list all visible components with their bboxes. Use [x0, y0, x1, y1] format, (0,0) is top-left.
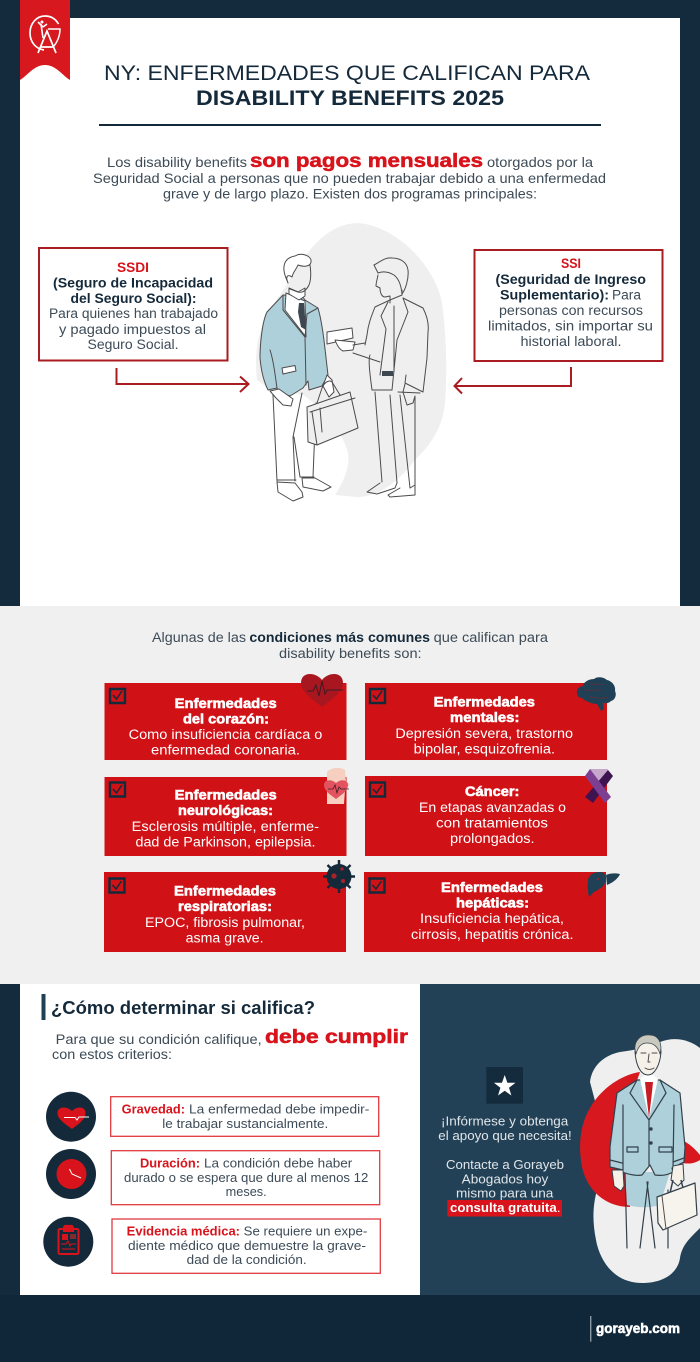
icon: medical clipboard	[43, 1217, 93, 1267]
criterion: evidencia médica: Evidencia médica:	[127, 1225, 240, 1239]
call to action text: mismo para una	[456, 1186, 553, 1200]
card: respiratorias: EPOC, fibrosis pulmonar,	[145, 915, 305, 930]
intro sentence: que califican para	[434, 630, 549, 645]
call to action text: el apoyo que necesita!	[438, 1129, 572, 1143]
card: corazón	[104, 674, 346, 760]
panel: introduction	[20, 0, 680, 608]
left man	[260, 254, 358, 501]
criterion: gravedad: Gravedad:	[122, 1103, 185, 1117]
illustration: lawyer with briefcase	[580, 1035, 700, 1283]
intro text: Los disability benefits	[107, 154, 247, 170]
icon: severity heart	[46, 1092, 96, 1142]
footer: website: gorayeb.com	[596, 1321, 680, 1336]
arrow: SSDI to illustration	[116, 368, 248, 392]
icon: virus	[323, 860, 355, 893]
title: NY: ENFERMEDADES QUE CALIFICAN PARA	[104, 62, 590, 85]
panel: qualifying conditions	[0, 606, 700, 984]
right man	[327, 258, 428, 497]
card: mentales	[365, 677, 616, 760]
intro text: Seguridad Social a personas que no pueden trabajar debido a una enfermedad	[93, 170, 606, 186]
criteria introduction	[52, 1026, 408, 1062]
criterion: gravedad	[111, 1097, 379, 1136]
box: SSI	[474, 250, 662, 361]
icon: liver	[588, 872, 620, 897]
card: neurológicas: neurológicas:	[178, 803, 273, 818]
box: SSI: historial laboral.	[520, 334, 622, 349]
logo ribbon	[20, 0, 70, 80]
arrow: SSI to illustration	[454, 367, 571, 394]
call to action text: Abogados hoy	[462, 1172, 549, 1186]
card: cáncer: Cáncer:	[465, 784, 519, 799]
box: SSI: SSI	[561, 256, 581, 271]
criteria introduction: debe cumplir	[265, 1026, 408, 1048]
icon: brain	[577, 677, 616, 711]
card: cáncer: prolongados.	[450, 831, 535, 846]
title	[104, 62, 590, 110]
criterion: duración: durado o se espera que dure al menos 12	[124, 1171, 368, 1185]
box: SSI: limitados, sin importar su	[488, 318, 653, 334]
card: hepáticas	[364, 872, 620, 952]
card: corazón: Como insuficiencia cardíaca o	[129, 727, 322, 742]
illustration: two businessmen	[256, 223, 446, 501]
card: cáncer: En etapas avanzadas o	[419, 800, 566, 815]
criteria introduction: con estos criterios:	[52, 1047, 172, 1062]
intro sentence	[152, 630, 549, 661]
title: DISABILITY BENEFITS 2025	[196, 87, 504, 110]
intro text: otorgados por la	[487, 154, 593, 170]
card: corazón: Enfermedades	[175, 696, 277, 711]
card: neurológicas: dad de Parkinson, epilepsia.	[136, 834, 316, 850]
criterion: duración: La condición debe haber	[204, 1157, 352, 1171]
box: SSDI: (Seguro de Incapacidad	[53, 276, 213, 291]
box: SSDI: Seguro Social.	[88, 337, 178, 352]
card: neurológicas	[104, 768, 350, 856]
card: hepáticas: cirrosis, hepatitis crónica.	[411, 927, 574, 942]
intro text: son pagos mensuales	[250, 150, 483, 172]
card: mentales: mentales:	[450, 710, 519, 725]
card: respiratorias: respiratorias:	[178, 899, 272, 914]
criterion: gravedad: le trabajar sustancialmente.	[162, 1117, 328, 1131]
call to action text: consulta gratuita	[450, 1201, 558, 1215]
intro sentence: Algunas de las	[152, 630, 246, 645]
card: respiratorias: Enfermedades	[174, 884, 276, 898]
card: neurológicas: Enfermedades	[175, 788, 277, 802]
icon: star	[486, 1067, 523, 1104]
card: neurológicas: Esclerosis múltiple, enferme-	[132, 819, 319, 834]
intro text: grave y de largo plazo. Existen dos programas principales:	[163, 186, 537, 202]
call to action text: .	[557, 1201, 560, 1215]
card: hepáticas: Insuficiencia hepática,	[420, 911, 564, 926]
card: mentales: Enfermedades	[434, 694, 535, 710]
call to action text	[438, 1115, 572, 1216]
criterion: evidencia médica	[112, 1219, 380, 1273]
box: SSI: Suplementario):	[500, 288, 609, 302]
card: respiratorias: asma grave.	[186, 930, 264, 946]
card: mentales: bipolar, esquizofrenia.	[414, 742, 555, 756]
call to action text: ¡Infórmese y obtenga	[441, 1115, 568, 1129]
criterion: evidencia médica: dad de la condición.	[187, 1253, 307, 1267]
footer: website	[590, 1316, 680, 1342]
criterion: gravedad: La enfermedad debe impedir-	[189, 1103, 369, 1117]
card: respiratorias	[104, 860, 355, 952]
box: SSI: (Seguridad de Ingreso	[496, 272, 646, 287]
box: SSDI: SSDI	[117, 260, 149, 275]
card: corazón: del corazón:	[183, 712, 269, 726]
criterion: evidencia médica: diente médico que demuestre la grave-	[128, 1239, 366, 1253]
call to action text: Contacte a Gorayeb	[446, 1158, 564, 1172]
criterion: evidencia médica: Se requiere un expe-	[244, 1225, 367, 1239]
card: hepáticas: hepáticas:	[456, 896, 529, 910]
panel: how to determine eligibility	[20, 984, 420, 1295]
card: mentales: Depresión severa, trastorno	[395, 726, 573, 741]
icon: heart	[301, 674, 343, 707]
box: SSI: Para	[612, 288, 641, 302]
card: cáncer	[365, 769, 613, 856]
criteria introduction: Para que su condición califique,	[56, 1032, 262, 1047]
icon: ribbon	[585, 769, 613, 803]
icon: hand with heart	[324, 768, 350, 804]
intro text	[93, 150, 606, 202]
box: SSDI: del Seguro Social):	[70, 291, 196, 306]
box: SSDI	[39, 248, 228, 360]
criterion: duración	[111, 1151, 380, 1205]
heading: ¿Cómo determinar si califica?	[51, 998, 315, 1018]
intro sentence: condiciones más comunes	[249, 630, 430, 645]
card: corazón: enfermedad coronaria.	[151, 742, 300, 758]
panel: call to action	[420, 984, 700, 1295]
card: cáncer: con tratamientos	[436, 816, 548, 830]
criterion: duración: Duración:	[140, 1157, 200, 1171]
box: SSDI: Para quienes han trabajado	[49, 306, 218, 321]
criterion: duración: meses.	[226, 1185, 267, 1199]
card: hepáticas: Enfermedades	[441, 880, 543, 895]
box: SSI: personas con recursos	[499, 303, 643, 318]
box: SSDI: y pagado impuestos al	[59, 322, 206, 337]
intro sentence: disability benefits son:	[279, 646, 422, 661]
icon: duration clock	[46, 1149, 96, 1199]
